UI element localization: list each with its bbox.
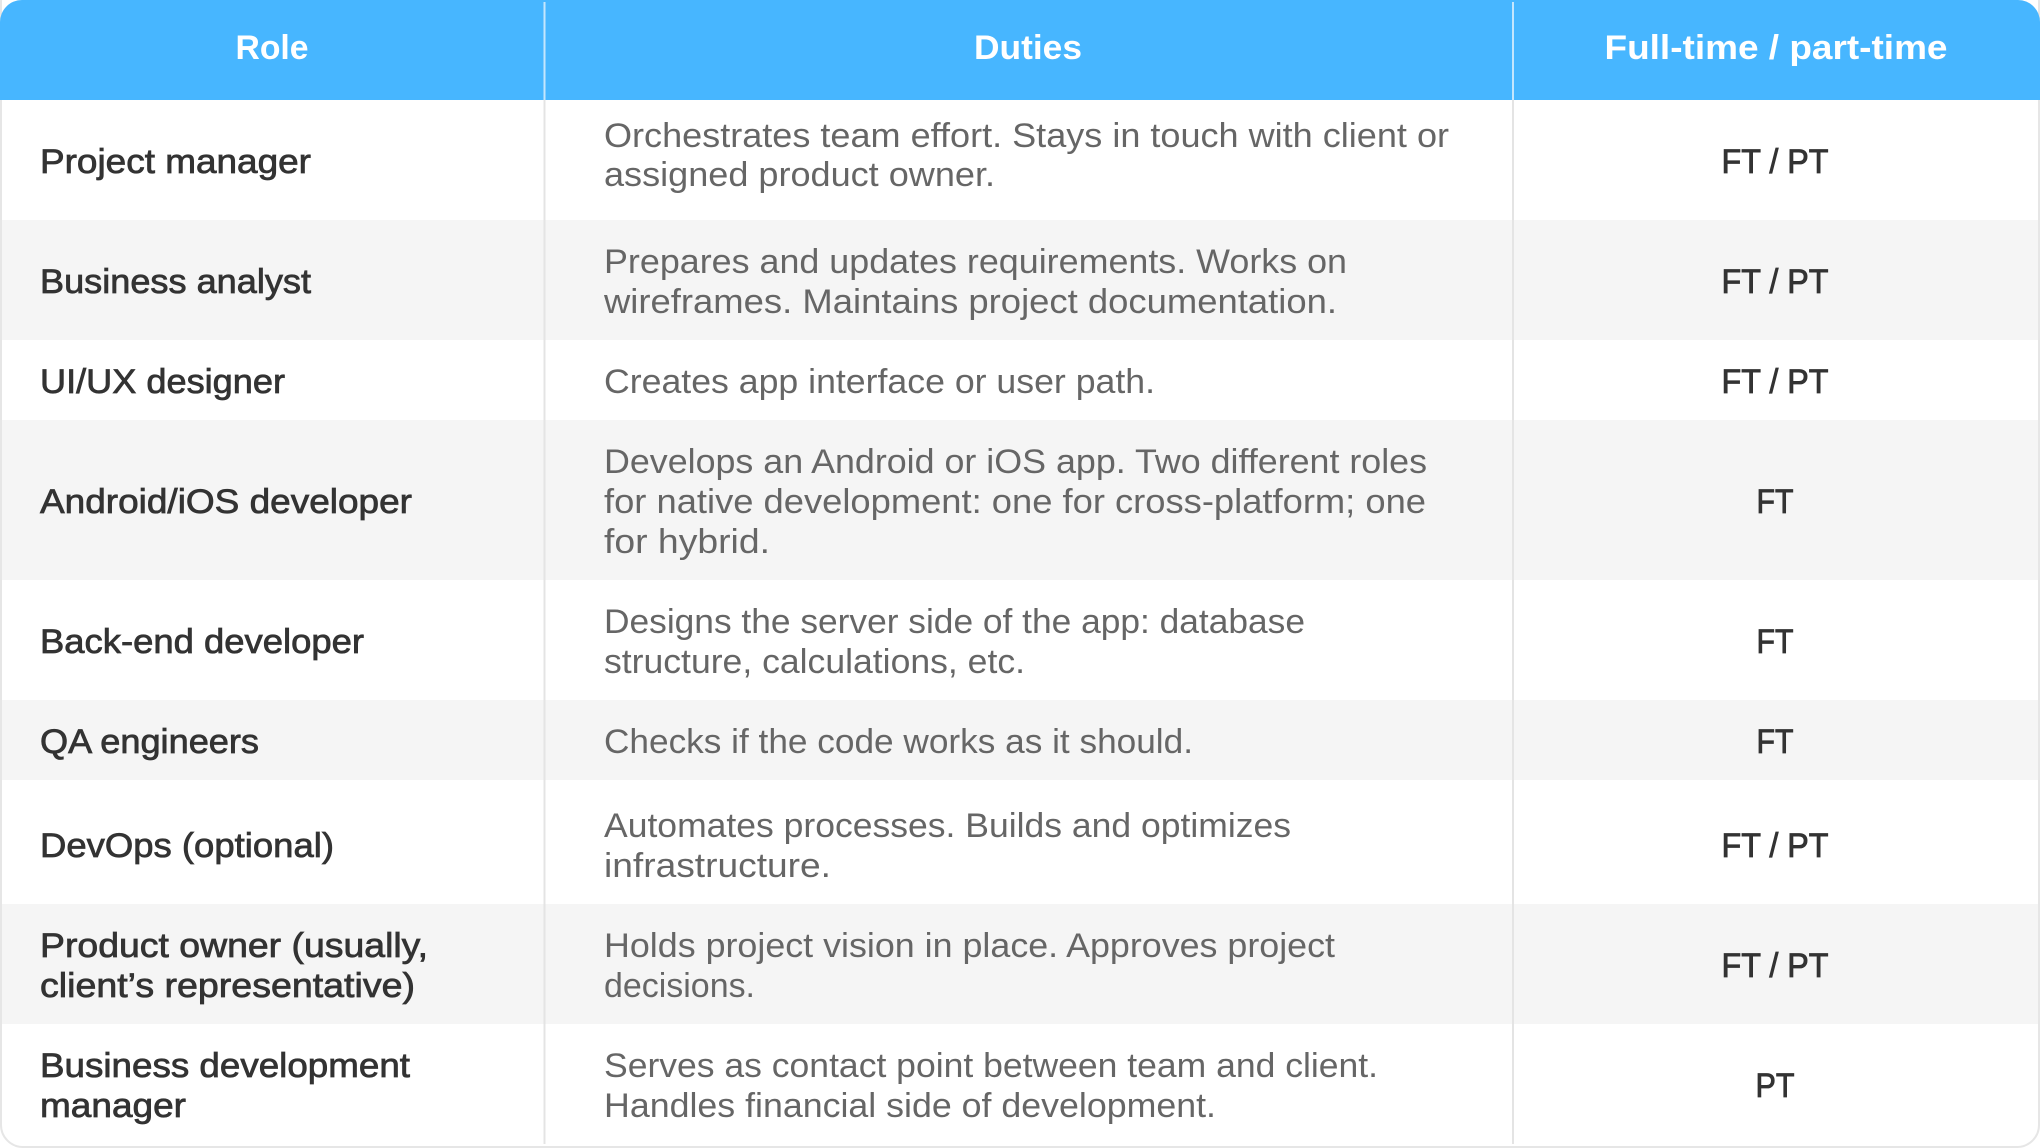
row: android/ios developer: FT bbox=[1756, 483, 1794, 521]
row: back-end developer: FT bbox=[1756, 623, 1794, 661]
row: qa engineers: FT bbox=[1756, 723, 1794, 761]
row: devops: Automates processes. Builds and optimizes bbox=[604, 807, 1291, 845]
row: project manager: FT / PT bbox=[1722, 143, 1828, 181]
row: product owner: client’s representative) bbox=[40, 967, 415, 1005]
row: devops bbox=[40, 807, 1828, 885]
row: android/ios developer: Android/iOS developer bbox=[40, 483, 412, 521]
row: devops: FT / PT bbox=[1722, 827, 1828, 865]
row: qa engineers: Checks if the code works as it should. bbox=[604, 723, 1193, 761]
row: ui/ux designer bbox=[40, 363, 1828, 401]
row: ui/ux designer: FT / PT bbox=[1722, 363, 1828, 401]
row: business analyst: Business analyst bbox=[40, 263, 312, 301]
header: full-time / part-time: Full-time / part-time bbox=[1604, 29, 1948, 67]
row: android/ios developer: for hybrid. bbox=[604, 523, 770, 561]
row: business analyst bbox=[40, 243, 1828, 321]
row: android/ios developer: Develops an Android or iOS app. Two different roles bbox=[604, 443, 1427, 481]
header: role: Role bbox=[236, 29, 308, 67]
row: business analyst: Prepares and updates requirements. Works on bbox=[604, 243, 1347, 281]
row: product owner: Product owner (usually, bbox=[40, 927, 428, 965]
row: back-end developer bbox=[40, 603, 1794, 681]
row: android/ios developer background bbox=[2, 420, 2038, 580]
row: business development manager: PT bbox=[1756, 1067, 1794, 1105]
row: devops: DevOps (optional) bbox=[40, 827, 334, 865]
row: ui/ux designer: UI/UX designer bbox=[40, 363, 285, 401]
row: project manager: Orchestrates team effort. Stays in touch with client or bbox=[604, 117, 1449, 155]
row: business development manager bbox=[40, 1047, 1794, 1125]
header labels bbox=[236, 29, 1948, 67]
row: product owner: Holds project vision in place. Approves project bbox=[604, 927, 1336, 965]
row: business development manager: Business development bbox=[40, 1047, 411, 1085]
row: qa engineers: QA engineers bbox=[40, 723, 259, 761]
row: business analyst: FT / PT bbox=[1722, 263, 1828, 301]
row: product owner: FT / PT bbox=[1722, 947, 1828, 985]
row: business development manager: manager bbox=[40, 1087, 186, 1125]
row: devops: infrastructure. bbox=[604, 847, 831, 885]
row: business development manager: Handles financial side of development. bbox=[604, 1087, 1216, 1125]
row: project manager: Project manager bbox=[40, 143, 311, 181]
row: ui/ux designer: Creates app interface or user path. bbox=[604, 363, 1155, 401]
row: product owner: decisions. bbox=[604, 967, 755, 1005]
row: project manager bbox=[40, 117, 1828, 194]
row: business development manager: Serves as contact point between team and client. bbox=[604, 1047, 1378, 1085]
row: project manager: assigned product owner. bbox=[604, 156, 995, 194]
row: android/ios developer: for native development: one for cross-platform; one bbox=[604, 483, 1426, 521]
row: business analyst background bbox=[2, 220, 2038, 340]
row: business analyst: wireframes. Maintains project documentation. bbox=[603, 283, 1337, 321]
row: android/ios developer bbox=[40, 443, 1794, 561]
row: qa engineers background bbox=[2, 700, 2038, 780]
row: product owner bbox=[40, 927, 1828, 1005]
row: back-end developer: structure, calculations, etc. bbox=[604, 643, 1025, 681]
row: back-end developer: Back-end developer bbox=[40, 623, 364, 661]
row: product owner background bbox=[2, 904, 2038, 1024]
row: qa engineers bbox=[40, 723, 1794, 761]
header band bbox=[0, 0, 2040, 100]
row: back-end developer: Designs the server side of the app: database bbox=[604, 603, 1305, 641]
header: duties: Duties bbox=[974, 29, 1082, 67]
